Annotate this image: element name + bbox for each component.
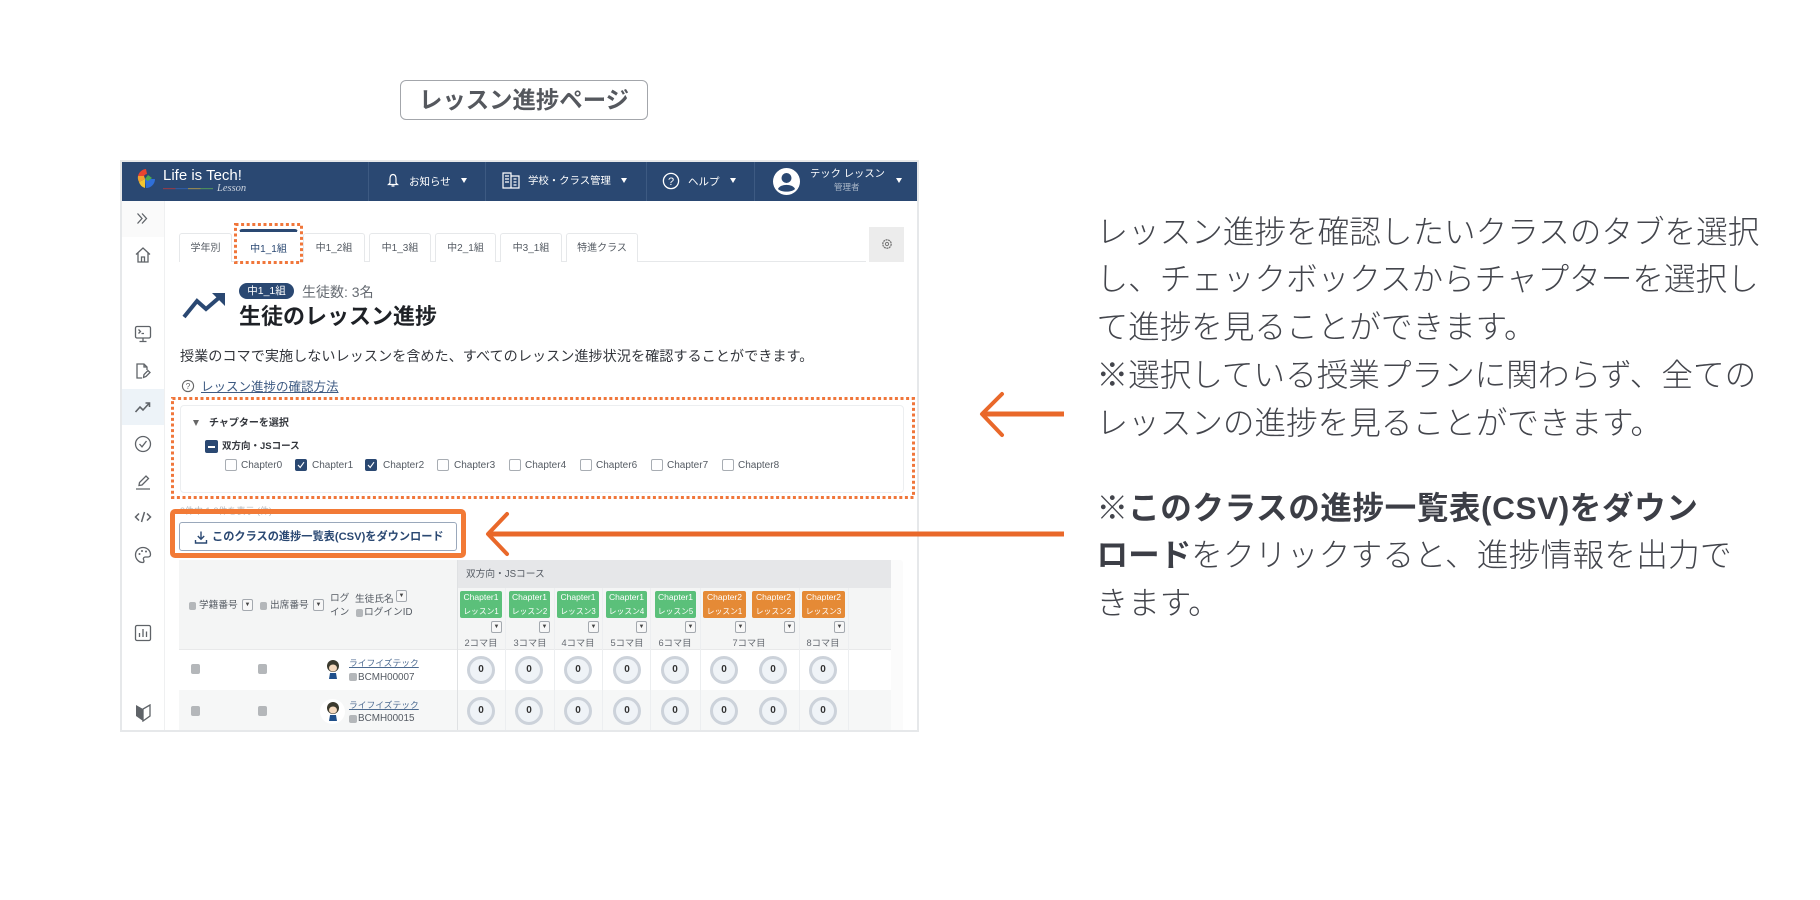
column header: student number: 学籍番号: [199, 600, 238, 611]
course checkbox: [205, 440, 218, 453]
text block: tab and chapter explanation: ※選択している授業プランに関わらず、全ての: [1096, 357, 1756, 393]
label: Chapter8: [738, 460, 779, 471]
period label: 8コマ目: [806, 638, 840, 648]
row 1: results: [467, 656, 837, 684]
lesson badge: [655, 591, 696, 618]
label: Chapter0: [241, 460, 282, 471]
row 2: student: [191, 699, 419, 724]
tab: [435, 233, 496, 262]
tab: [500, 233, 562, 262]
arrow: to download button: [486, 512, 1064, 556]
column header: student number: [189, 599, 253, 611]
checkbox: [437, 459, 449, 471]
tabs underline: [179, 261, 866, 262]
icon: double chevron: [137, 213, 148, 224]
lesson badge: Chapter1: [464, 592, 498, 602]
column header: student number: ▼: [245, 602, 250, 608]
lesson badge: [557, 591, 599, 618]
lesson badge: [752, 591, 795, 618]
panel: app screenshot: ▼: [787, 624, 792, 630]
chapter selection heading: チャプターを選択: [209, 418, 289, 429]
table: [179, 560, 891, 730]
tab: [566, 233, 638, 262]
tab: by grade: [179, 233, 232, 262]
period label: 6コマ目: [658, 638, 692, 648]
icon: terminal: [134, 326, 152, 342]
checkbox: [509, 459, 521, 471]
row 1: student: ライフイズテック: [349, 658, 419, 668]
nav: help: ヘルプ: [688, 176, 720, 188]
lesson badge: レッスン1: [707, 606, 742, 616]
description: 授業のコマで実施しないレッスンを含めた、すべてのレッスン進捗状況を確認することができます。: [180, 348, 813, 364]
text block: CSV download explanation: [1096, 490, 1732, 621]
icon: palette: [134, 546, 152, 564]
tab: [369, 233, 431, 262]
icon: download: [194, 532, 208, 544]
period label: 7コマ目: [732, 638, 766, 648]
checkbox checked: [365, 459, 377, 471]
icon: bell: [387, 174, 399, 187]
period label: 5コマ目: [610, 638, 644, 648]
checkbox: [651, 459, 663, 471]
lesson badge: Chapter1: [561, 592, 595, 602]
lesson badge: Chapter2: [806, 592, 841, 602]
text block: tab and chapter explanation: レッスンの進捗を見ることができます。: [1096, 405, 1662, 441]
row 2 background: [179, 690, 891, 732]
icon: building: [502, 172, 520, 189]
icon: help: ?: [668, 176, 674, 188]
lesson badge: [802, 591, 845, 618]
icon: document edit: [136, 363, 151, 379]
tab: 中2_1組: [447, 243, 484, 254]
checkbox checked: [295, 459, 307, 471]
period label: 3コマ目: [513, 638, 547, 648]
lesson badge: レッスン3: [560, 606, 596, 616]
row 1: results: 0: [770, 664, 776, 675]
column header: login id: ログインID: [364, 607, 412, 618]
text block: tab and chapter explanation: [1096, 214, 1759, 441]
panel: app screenshot: ▼: [639, 624, 644, 630]
icon: beginner leaf: [136, 704, 151, 722]
row 2: results: 0: [721, 705, 727, 716]
panel: app screenshot: ▼: [591, 624, 596, 630]
logo wordmark: Life is Tech!: [163, 167, 242, 184]
lesson badge: レッスン2: [512, 606, 547, 616]
icon: check circle: [134, 436, 152, 452]
lesson badge: Chapter2: [756, 592, 791, 602]
icon: bar report: [134, 624, 152, 642]
course band: [457, 560, 891, 588]
lesson badge: レッスン2: [756, 606, 791, 616]
heading label: レッスン進捗ページ: [400, 80, 648, 120]
nav: notices: お知らせ: [409, 176, 451, 188]
header right block: [457, 588, 891, 649]
lesson badge: レッスン3: [806, 606, 841, 616]
lesson badge: レッスン5: [658, 606, 693, 616]
column header: student name: [355, 590, 407, 605]
heading label: レッスン進捗ページ: レッスン進捗ページ: [419, 87, 629, 113]
column header: login: ログイン: [330, 593, 349, 618]
user name: テック レッスン: [810, 169, 885, 180]
row 1: results: 0: [478, 664, 484, 675]
lesson badge: [703, 591, 746, 618]
lesson badge: レッスン4: [609, 606, 644, 616]
checkbox: [225, 459, 237, 471]
logo rule: [163, 188, 213, 190]
chapter selection card: [180, 405, 904, 493]
panel: app screenshot: ▼: [738, 624, 743, 630]
checkbox: [722, 459, 734, 471]
lesson badge: [460, 591, 502, 618]
row 2: results: 0: [526, 705, 532, 716]
icon: home: [136, 247, 150, 263]
row 1: results: 0: [820, 664, 826, 675]
callout: dotted highlight on chapter selector: [171, 397, 915, 499]
panel: app screenshot: [120, 160, 919, 732]
tab: by grade: 学年別: [190, 243, 220, 254]
tab: 特進クラス: [577, 243, 627, 254]
help link: レッスン進捗の確認方法: [201, 380, 339, 394]
row 1: student: BCMH00007: [358, 672, 415, 683]
panel: app screenshot: ▼: [494, 624, 499, 630]
text block: CSV download explanation: きます。: [1096, 585, 1220, 621]
icon: user avatar: [773, 168, 800, 195]
row 1: student: [191, 658, 419, 683]
lesson badge: [509, 591, 550, 618]
period label: 2コマ目: [464, 638, 498, 648]
callout: solid highlight on download button: [170, 509, 466, 558]
row 2: results: 0: [624, 705, 630, 716]
icon: code: [134, 512, 152, 522]
sidebar: [122, 201, 165, 732]
logo Lesson script: Lesson: [217, 183, 246, 194]
label: Chapter3: [454, 460, 495, 471]
column header: student name: 生徒氏名: [355, 594, 394, 605]
tab: 中1_3組: [382, 243, 418, 254]
text block: tab and chapter explanation: て進捗を見ることができます。: [1096, 309, 1536, 345]
sidebar active row: [122, 389, 164, 425]
text block: tab and chapter explanation: レッスン進捗を確認したいクラスのタブを選択: [1096, 214, 1759, 250]
row 2: student: BCMH00015: [358, 713, 415, 724]
row 1 background: [179, 649, 891, 690]
icon: logo: [138, 169, 155, 188]
triangle: [193, 420, 199, 426]
column header: student name: ▼: [399, 593, 404, 599]
period label: 4コマ目: [561, 638, 595, 648]
icon: trend arrow: [182, 293, 225, 318]
header bar: [122, 162, 922, 201]
settings button: [869, 227, 904, 262]
download label: このクラスの進捗一覧表(CSV)をダウンロード: [212, 531, 444, 543]
column header: attendance number: ▼: [316, 602, 321, 608]
label: Chapter7: [667, 460, 708, 471]
class chip: [239, 283, 294, 299]
icon: trending: [135, 402, 150, 412]
row 2: results: 0: [770, 705, 776, 716]
tab: selected class: 中1_1組: [250, 244, 287, 255]
lesson badge: レッスン1: [463, 606, 499, 616]
nav: school and class admin: 学校・クラス管理: [528, 176, 611, 187]
row 2: results: [467, 697, 837, 725]
row 1: results: 0: [575, 664, 581, 675]
row 2: results: 0: [575, 705, 581, 716]
text block: tab and chapter explanation: し、チェックボックスからチャプターを選択し: [1096, 261, 1759, 297]
caret: [621, 178, 627, 183]
row 2: results: 0: [478, 705, 484, 716]
label: Chapter2: [383, 460, 424, 471]
lesson badge: Chapter1: [658, 592, 693, 602]
arrow: to chapter selector: [980, 392, 1064, 438]
user role: 管理者: [834, 182, 860, 192]
lesson badge: Chapter1: [512, 592, 547, 602]
icon: help circle: [182, 380, 194, 392]
tab: 中1_2組: [316, 243, 352, 254]
caret: [896, 178, 902, 183]
label: Chapter6: [596, 460, 637, 471]
row 1: results: 0: [526, 664, 532, 675]
faint count text: 3件中 1-3件を表示 (件): [180, 506, 272, 516]
caret: [461, 178, 467, 183]
tab: 中3_1組: [513, 243, 549, 254]
tab: selected class: [239, 229, 298, 262]
tab: [303, 233, 365, 262]
column header: attendance number: [260, 599, 324, 611]
text block: CSV download explanation: ロードをクリックすると、進捗情報を出力で: [1096, 537, 1732, 573]
text block: CSV download explanation: ※このクラスの進捗一覧表(CSV)をダウン: [1096, 490, 1698, 526]
row 2: results: 0: [820, 705, 826, 716]
label: Chapter4: [525, 460, 566, 471]
student count: 生徒数: 3名: [302, 284, 374, 300]
label: Chapter1: [312, 460, 353, 471]
row 2: student: ライフイズテック: [349, 700, 419, 710]
download button: [179, 522, 457, 551]
icon: pen: [136, 475, 150, 490]
icon: help: [662, 172, 680, 190]
course band label: 双方向・JSコース: [466, 569, 545, 580]
class chip: 中1_1組: [247, 285, 286, 297]
row 1: results: 0: [624, 664, 630, 675]
panel: app screenshot: ▼: [688, 624, 693, 630]
row 1: results: 0: [672, 664, 678, 675]
header left block: [179, 560, 457, 649]
callout: dotted highlight on tab: [234, 223, 303, 264]
lesson badge: Chapter2: [707, 592, 742, 602]
panel: app screenshot: ▼: [542, 624, 547, 630]
row 1: results: 0: [721, 664, 727, 675]
row 2: results: 0: [672, 705, 678, 716]
column header: attendance number: 出席番号: [270, 600, 309, 611]
page title: 生徒のレッスン進捗: [239, 304, 437, 329]
checkbox: [580, 459, 592, 471]
icon: help circle: ?: [186, 381, 191, 391]
icon: gear: [882, 239, 892, 249]
lesson badge: [606, 591, 647, 618]
lesson badge: Chapter1: [609, 592, 644, 602]
caret: [730, 178, 736, 183]
sidebar toggle: [122, 201, 164, 237]
table background: [179, 560, 903, 732]
course name: 双方向・JSコース: [222, 441, 300, 452]
panel: app screenshot: ▼: [837, 624, 842, 630]
